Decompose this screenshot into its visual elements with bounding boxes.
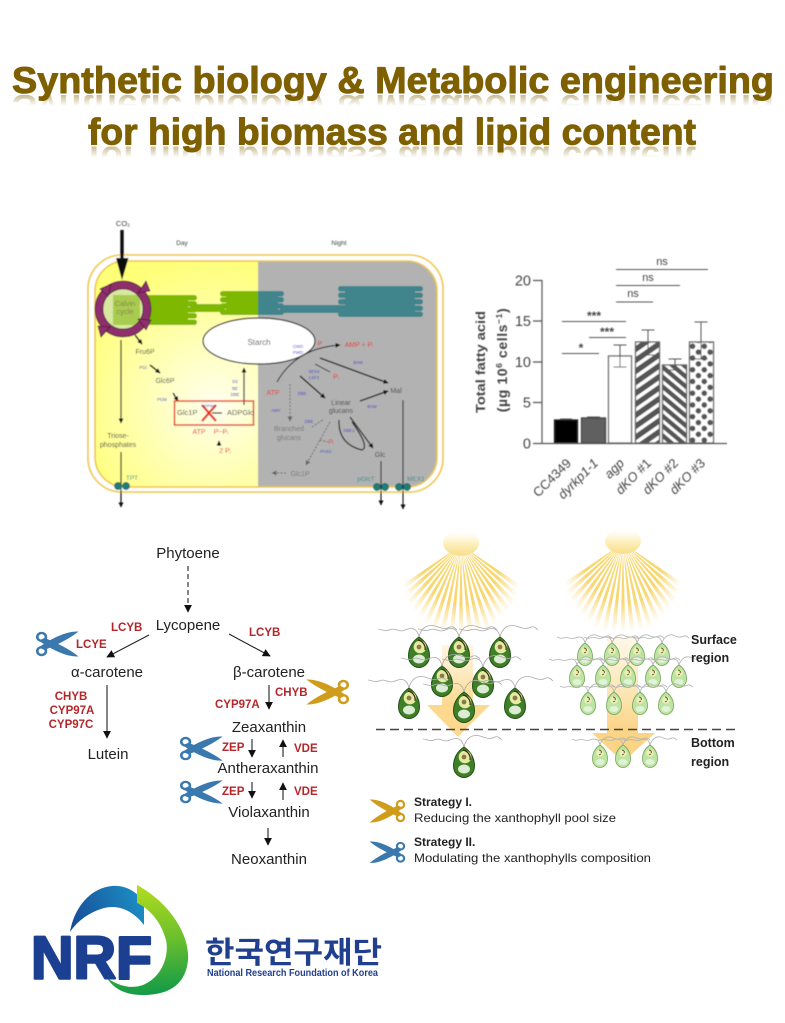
- pathway arrows: [107, 566, 283, 845]
- y tick labels: 5: [523, 396, 531, 412]
- y tick labels: 0: [523, 436, 531, 452]
- red box with knocked out AGPase: Glc1P: [177, 408, 197, 417]
- panel: starch metabolism cell diagram: [88, 219, 443, 509]
- significance brackets: ***: [600, 325, 614, 339]
- compound names: Violaxanthin: [228, 804, 310, 821]
- enzyme labels: DBE: [305, 419, 314, 424]
- logo: NRF: [31, 885, 382, 995]
- enzyme labels: AMY: [271, 408, 281, 413]
- y tick labels: [515, 274, 531, 452]
- arrows: [116, 230, 403, 509]
- y tick labels: 10: [515, 355, 531, 371]
- metabolite labels: ATP: [192, 429, 206, 436]
- enzyme labels: SS: [232, 379, 238, 384]
- compound names: [71, 545, 318, 868]
- bars: [554, 342, 714, 443]
- significance brackets: ns: [642, 272, 654, 284]
- region labels: Surface: [691, 633, 737, 647]
- metabolite labels: [100, 341, 425, 483]
- enzyme labels: PGI: [139, 365, 147, 370]
- significance brackets: *: [579, 341, 584, 355]
- panel: light penetration in algal culture: [368, 528, 740, 865]
- title: for high biomass and lipid content: [88, 112, 696, 152]
- dark green algal cells: [368, 625, 553, 778]
- compound names: Lutein: [88, 746, 128, 763]
- red box with knocked out AGPase: ADPGlc: [227, 408, 254, 417]
- enzyme names: CYP97C: [49, 719, 93, 731]
- metabolite labels: Glc6P: [155, 378, 175, 385]
- swoosh blue: [70, 886, 144, 932]
- enzyme labels: [139, 344, 377, 454]
- enzyme names: VDE: [294, 743, 318, 755]
- metabolite labels: Glc1P: [290, 471, 310, 478]
- red box with knocked out AGPase: AGPase: [202, 403, 217, 408]
- compound names: Antheraxanthin: [218, 760, 318, 777]
- metabolite labels: Linear: [331, 400, 351, 407]
- x labels: dKO #2: [639, 456, 681, 497]
- strategy legend: Reducing the xanthophyll pool size: [414, 811, 616, 825]
- panel: starch metabolism cell diagram: Night: [331, 240, 347, 247]
- axes: [533, 280, 727, 444]
- enzyme labels: DBE: [231, 392, 240, 397]
- strategy legend: [371, 795, 651, 865]
- compound names: β-carotene: [233, 664, 305, 681]
- enzyme names: LCYB: [111, 622, 142, 634]
- y axis title: [473, 308, 510, 413]
- metabolite labels: Glc: [375, 452, 386, 459]
- enzyme labels: BAM: [353, 360, 363, 365]
- title: Synthetic biology & Metabolic engineering: [12, 87, 774, 128]
- y tick labels: 15: [515, 314, 531, 330]
- logo: NRF: National Research Foundation of Korea: [207, 968, 378, 979]
- significance brackets: ***: [587, 309, 601, 323]
- significance brackets: [562, 256, 708, 355]
- region labels: region: [691, 755, 729, 769]
- sun rays right: [563, 528, 683, 633]
- significance brackets: ns: [656, 256, 668, 268]
- enzyme names: ZEP: [222, 786, 245, 798]
- compound names: Phytoene: [156, 545, 220, 562]
- enzyme labels: BAM: [367, 404, 377, 409]
- enzyme names: [49, 622, 318, 798]
- region labels: region: [691, 651, 729, 665]
- enzyme names: VDE: [294, 786, 318, 798]
- y axis title: (µg 10: [494, 368, 510, 412]
- metabolite labels: P~Pᵢ: [214, 429, 228, 436]
- starch granule: [203, 318, 315, 364]
- title: for high biomass and lipid content: [88, 138, 696, 180]
- strategy legend: Strategy II.: [414, 835, 475, 849]
- scissors: pathway knockouts: [37, 632, 348, 803]
- compound names: Lycopene: [156, 617, 220, 634]
- enzyme labels: PGM: [157, 397, 167, 402]
- x labels: agp: [601, 456, 627, 481]
- Calvin cycle: cycle: [116, 307, 134, 316]
- compound names: Zeaxanthin: [232, 719, 306, 736]
- strategy legend: Modulating the xanthophylls composition: [414, 851, 651, 865]
- strategy legend: Strategy I.: [414, 795, 472, 809]
- enzyme labels: BE: [232, 386, 238, 391]
- metabolite labels: P: [318, 341, 323, 348]
- enzyme labels: PWD: [293, 350, 303, 355]
- enzyme names: CHYB: [275, 687, 308, 699]
- enzyme labels: SEX4: [308, 369, 320, 374]
- metabolite labels: ATP: [266, 390, 280, 397]
- panel: starch metabolism cell diagram: CO₂: [116, 219, 130, 228]
- significance brackets: ns: [627, 288, 639, 300]
- panel: starch metabolism cell diagram: Day: [176, 240, 189, 247]
- compound names: Neoxanthin: [231, 851, 307, 868]
- metabolite labels: Mal: [390, 388, 402, 395]
- x labels: [530, 456, 708, 502]
- metabolite labels: Pᵢ: [333, 374, 339, 381]
- metabolite labels: glucans: [329, 408, 354, 415]
- metabolite labels: glucans: [277, 435, 302, 442]
- starch granule: Starch: [247, 338, 271, 347]
- enzyme names: LCYB: [249, 627, 280, 639]
- enzyme names: ZEP: [222, 742, 245, 754]
- region labels: Bottom: [691, 736, 735, 750]
- enzyme labels: PHS1: [320, 449, 332, 454]
- y axis title: ): [494, 308, 510, 313]
- sun rays left: [401, 530, 521, 635]
- logo: NRF: 한국연구재단: [205, 928, 382, 972]
- title: Synthetic biology & Metabolic engineering: [12, 60, 774, 101]
- title: [12, 60, 774, 180]
- metabolite labels: Pᵢ: [328, 439, 334, 446]
- y axis title: Total fatty acid: [473, 311, 488, 413]
- metabolite labels: TPT: [126, 475, 138, 482]
- enzyme labels: DBE1: [343, 428, 355, 433]
- x labels: dKO #3: [666, 456, 708, 497]
- swoosh green: [107, 885, 188, 995]
- x labels: dyrkp1-1: [555, 456, 601, 502]
- enzyme labels: LSF2: [309, 375, 320, 380]
- pale green algal cells: [549, 635, 706, 768]
- error bars: [560, 322, 708, 419]
- large light arrow left: [427, 645, 490, 737]
- cell envelope: [88, 255, 443, 492]
- y axis title: cells: [494, 324, 510, 363]
- red box with knocked out AGPase: [174, 401, 254, 425]
- x labels: dKO #1: [612, 456, 654, 497]
- y axis title: 6: [494, 363, 504, 368]
- compound names: α-carotene: [71, 664, 143, 681]
- x labels: CC4349: [530, 456, 574, 500]
- bar chart: total fatty acid: [473, 256, 727, 502]
- metabolite labels: Triose-: [107, 433, 129, 440]
- logo: NRF: NRF: [31, 924, 152, 992]
- enzyme names: CHYB: [55, 691, 87, 703]
- enzyme names: LCYE: [76, 639, 107, 651]
- enzyme labels: DBE: [298, 391, 307, 396]
- y axis title: −1: [494, 313, 504, 324]
- metabolite labels: phosphates: [100, 442, 137, 449]
- Calvin cycle: Calvin: [115, 299, 135, 308]
- large light arrow right: [592, 638, 655, 762]
- metabolite labels: AMP + Pᵢ: [345, 342, 373, 349]
- enzyme labels: GWD: [293, 344, 303, 349]
- carotenoid pathway: [37, 545, 348, 868]
- membrane transporters: [114, 482, 411, 491]
- metabolite labels: pGlcT: [357, 476, 375, 483]
- Calvin cycle: [98, 281, 151, 337]
- y tick labels: 20: [515, 274, 531, 290]
- metabolite labels: Fru6P: [135, 349, 155, 356]
- thylakoids: [113, 286, 423, 325]
- region labels: [691, 633, 737, 769]
- metabolite labels: 2 Pᵢ: [219, 448, 231, 455]
- enzyme names: CYP97A: [50, 705, 94, 717]
- enzyme names: CYP97A: [215, 699, 260, 711]
- metabolite labels: Branched: [274, 426, 304, 433]
- metabolite labels: MEX1: [407, 476, 425, 483]
